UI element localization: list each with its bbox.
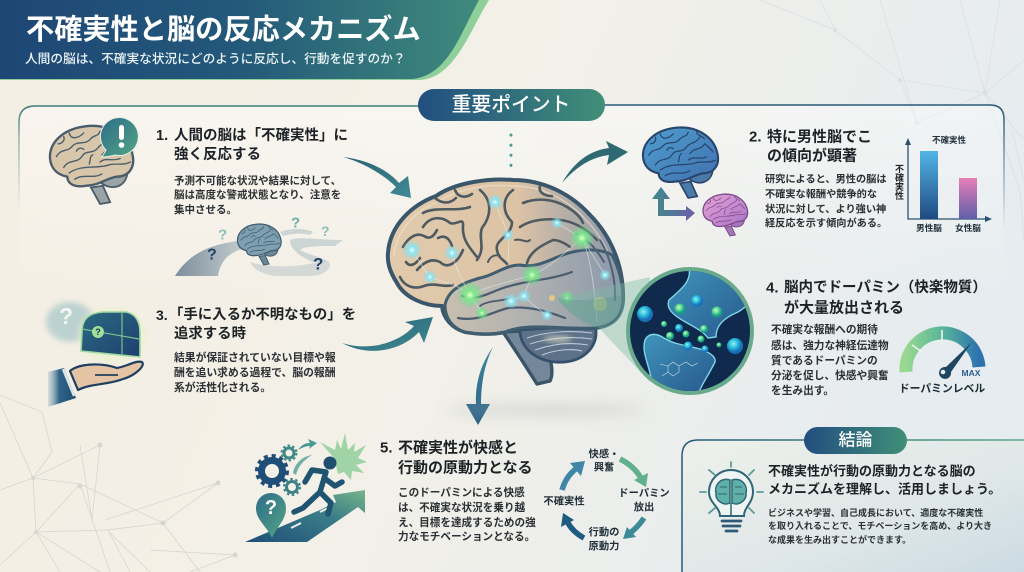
point 5 text: 5. (380, 440, 397, 456)
heading pill: key points: 重要ポイント (452, 94, 570, 116)
gauge: dopamine level (899, 330, 985, 395)
icon: brain light bulb (700, 462, 763, 531)
zoom cone (557, 277, 650, 382)
cycle diagram: 快感・ (589, 448, 619, 460)
point 4 text: 質であるドーパミンの (771, 354, 878, 367)
point 5 text (380, 438, 536, 543)
inner rim highlight (394, 186, 617, 298)
point 3 text: 結果が保証されていない目標や報 (174, 350, 336, 364)
cycle diagram (543, 448, 670, 552)
conclusion text: ビジネスや学習、自己成長において、適度な不確実性 (768, 507, 983, 518)
point 2 text: の傾向が顕著 (767, 146, 857, 164)
point 4 text: 感は、強力な神経伝達物 (771, 339, 889, 352)
cycle diagram: 興奮 (594, 460, 614, 474)
question pin (256, 493, 286, 538)
heading pill: key points (418, 89, 605, 121)
point 2 text: 不確実な報酬や競争的な (765, 188, 877, 200)
point 2 text: 経反応を示す傾向がある。 (765, 216, 887, 230)
point 5 text: は、不確実な状況を乗り越 (398, 501, 526, 514)
point 4 text: が大量放出される (784, 298, 904, 316)
point 1 text (156, 127, 348, 216)
point 2 text (749, 128, 887, 230)
conclusion pill: 結論 (838, 430, 872, 450)
conclusion text (768, 464, 1001, 545)
point 3 text: 「手に入るか不明なもの」を (169, 306, 356, 323)
gauge: dopamine level: ドーパミンレベル (899, 382, 985, 395)
bar chart: male vs female: 男性脳 (916, 222, 942, 233)
icon: branching road with question marks: ? (291, 214, 300, 232)
key points panel frame (19, 105, 1004, 300)
arrow to point 5 (466, 347, 493, 425)
point 4 text: 4. (766, 280, 783, 296)
point 4 text: 分泌を促し、快感や興奮 (771, 369, 889, 382)
point 1 text: 人間の脳は「不確実性」に (174, 127, 348, 144)
conclusion pill (804, 427, 907, 454)
point 1 text: 予測不可能な状況や結果に対して、 (174, 174, 341, 187)
arrow from point 3 (342, 317, 433, 351)
point 1 text: 強く反応する (174, 146, 261, 163)
icon: male and female brains (643, 128, 748, 236)
point 4 text: を生み出す。 (771, 384, 834, 397)
bar chart: male vs female: 不確実性 (932, 135, 966, 145)
point 3 text (156, 306, 356, 394)
arrow to brain from point 1 (343, 157, 411, 198)
point 4 text: 不確実な報酬への期待 (771, 323, 878, 336)
point 5 text: 力なモチベーションとなる。 (398, 530, 535, 543)
cerebrum (388, 180, 623, 334)
neural connections (412, 202, 605, 322)
point 1 text: 集中させる。 (174, 203, 237, 216)
synapse magnified circle (628, 268, 752, 393)
icon: branching road with question marks: ? (218, 226, 227, 244)
burst (320, 433, 367, 480)
point 5 text: 不確実性が快感と (398, 438, 518, 456)
point 2 text: 2. (749, 128, 766, 146)
conclusion panel (682, 427, 1024, 572)
point 4 text (766, 278, 987, 397)
shadow under main brain (445, 405, 645, 415)
bar chart: male vs female: 女性脳 (955, 222, 981, 233)
conclusion text: な成果を生み出すことができます。 (768, 534, 911, 545)
conclusion text: メカニズムを理解し、活用しましょう。 (768, 482, 1001, 496)
cortical folds (400, 186, 615, 319)
point 3 text: 酬を追い求める過程で、脳の報酬 (174, 365, 336, 379)
point 3 text: 3. (156, 307, 172, 323)
cycle diagram: 原動力 (589, 540, 619, 552)
glowing nodes (402, 194, 611, 321)
header banner (0, 0, 489, 80)
dotted connector (510, 135, 512, 166)
brain stem (503, 330, 552, 384)
network pattern: lower left (0, 395, 238, 572)
icon: branching road with question marks: ? (313, 254, 323, 274)
conclusion text: を取り入れることで、モチベーションを高め、より大き (768, 520, 992, 531)
comparison arrows (652, 187, 695, 221)
gauge: dopamine level: MAX (962, 368, 981, 378)
icon: treasure chest on hand: ? (95, 327, 101, 337)
arrow to point 2 (562, 141, 628, 183)
point 4 text: 脳内でドーパミン（快楽物質） (784, 278, 987, 296)
icon: runner on road (245, 433, 367, 542)
point 1 text: 脳は高度な警戒状態となり、注意を (174, 188, 341, 201)
gears (262, 460, 282, 482)
temporal lobe (445, 250, 623, 334)
cycle diagram: 行動の (589, 526, 619, 538)
main brain (388, 180, 623, 384)
icon: treasure chest on hand (46, 302, 146, 407)
cycle diagram: 放出 (634, 500, 654, 514)
point 5 text: 行動の原動力となる (398, 460, 533, 476)
point 3 text: 系が活性化される。 (174, 380, 271, 394)
icon: treasure chest on hand: ? (59, 303, 73, 329)
point 5 text: え、目標を達成するための強 (398, 516, 536, 529)
cerebellum (520, 325, 596, 362)
point 5 text: このドーパミンによる快感 (398, 486, 525, 499)
bar chart: male vs female: 不確実性 (894, 164, 904, 200)
point 2 text: 研究によると、男性の脳は (765, 172, 887, 186)
point 3 text: 追求する時 (174, 324, 246, 342)
icon: branching road with question marks (175, 214, 343, 276)
bar chart: male vs female (894, 135, 992, 233)
cycle diagram: 不確実性 (543, 494, 585, 508)
icon: branching road with question marks: ? (321, 223, 330, 239)
icon: brain with alert bubble (50, 118, 138, 204)
point 2 text: 状況に対して、より強い神 (765, 202, 886, 216)
point 1 text: 1. (156, 128, 172, 144)
point 2 text: 特に男性脳でこ (767, 128, 872, 146)
conclusion text: 不確実性が行動の原動力となる脳の (768, 464, 976, 478)
title: 不確実性と脳の反応メカニズム (26, 13, 421, 45)
icon: runner on road: ? (265, 497, 277, 519)
icon: branching road with question marks: ? (207, 246, 217, 264)
subtitle: 人間の脳は、不確実な状況にどのように反応し、行動を促すのか？ (25, 51, 406, 66)
cycle arrows (562, 459, 644, 538)
network pattern: upper right (760, 0, 1024, 240)
cycle diagram: ドーパミン (618, 488, 670, 500)
